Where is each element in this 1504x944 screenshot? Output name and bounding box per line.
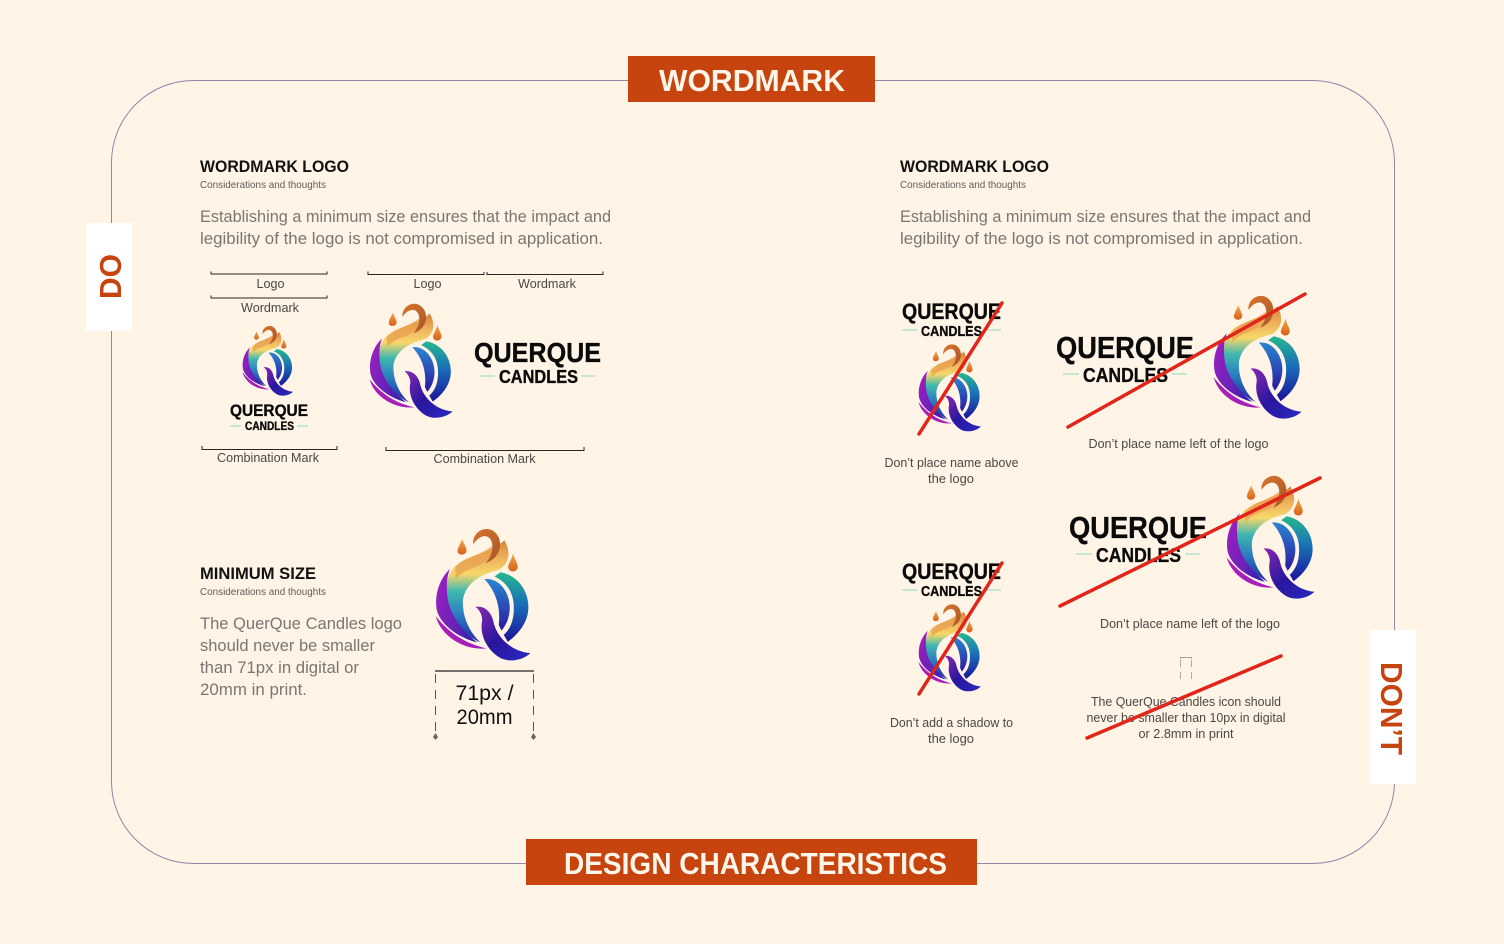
stacked combination mark diagram: QUERQUE	[230, 401, 308, 420]
horizontal combination mark diagram: QUERQUE	[474, 337, 601, 368]
don't: shadow on the logo: Don’t add a shadow to	[890, 716, 1013, 730]
minimum size text	[200, 564, 402, 699]
don't: name left of the logo, second example: CANDLES	[1096, 545, 1181, 567]
stacked combination mark diagram: Logo	[256, 277, 285, 291]
minimum size logo with measure: 20mm	[456, 706, 512, 729]
stacked combination mark diagram: CANDLES	[245, 421, 294, 433]
don't: name left of the logo, second example	[1060, 476, 1320, 631]
minimum size logo with measure	[433, 529, 536, 740]
banner: design characteristics	[526, 839, 977, 885]
don't: icon smaller than minimum	[1086, 656, 1286, 741]
don't: name above the logo: CANDLES	[921, 324, 982, 340]
don't: icon smaller than minimum: never be smaller than 10px in digital	[1086, 711, 1286, 725]
panel: do wordmark logo text: legibility of the logo is not compromised in application.	[200, 229, 603, 248]
horizontal combination mark diagram: CANDLES	[499, 367, 578, 387]
don't: name above the logo: the logo	[928, 472, 974, 486]
minimum size text: MINIMUM SIZE	[200, 564, 316, 583]
don't: name left of the logo, second example: QUERQUE	[1069, 510, 1207, 545]
minimum size text: should never be smaller	[200, 636, 375, 655]
panel: do wordmark logo text: Establishing a minimum size ensures that the impact and	[200, 207, 611, 226]
don't: icon smaller than minimum: The QuerQue Candles icon should	[1091, 695, 1281, 709]
stacked combination mark diagram	[202, 272, 337, 465]
don't: name above the logo	[884, 299, 1019, 486]
panel: don't wordmark logo text: Considerations and thoughts	[900, 179, 1026, 191]
banner: wordmark: WORDMARK	[659, 63, 846, 98]
don't: name left of the logo: Don’t place name left of the logo	[1088, 437, 1269, 451]
tab: don't	[1370, 630, 1416, 784]
panel: do wordmark logo text	[200, 157, 611, 248]
don't: name above the logo: QUERQUE	[902, 299, 1001, 324]
panel: do wordmark logo text: WORDMARK LOGO	[200, 157, 349, 176]
minimum size logo with measure: 71px /	[456, 682, 514, 705]
minimum size text: than 71px in digital or	[200, 658, 359, 677]
don't: name left of the logo, second example: Don’t place name left of the logo	[1100, 617, 1280, 631]
stacked combination mark diagram: Wordmark	[241, 301, 300, 315]
panel: don't wordmark logo text	[900, 157, 1311, 248]
horizontal combination mark diagram: Combination Mark	[434, 452, 536, 466]
horizontal combination mark diagram: Wordmark	[518, 277, 577, 291]
horizontal combination mark diagram	[368, 272, 603, 466]
don't: name above the logo: Don’t place name above	[884, 456, 1019, 470]
tab: do	[86, 223, 132, 331]
panel: do wordmark logo text: Considerations and thoughts	[200, 179, 326, 191]
banner: design characteristics: DESIGN CHARACTERISTICS	[564, 846, 947, 881]
don't: icon smaller than minimum: or 2.8mm in print	[1138, 727, 1234, 741]
panel: don't wordmark logo text: Establishing a minimum size ensures that the impact and	[900, 207, 1311, 226]
don't: shadow on the logo	[890, 559, 1013, 746]
minimum size text: The QuerQue Candles logo	[200, 614, 402, 633]
don't: name left of the logo	[1056, 294, 1305, 451]
don't: name left of the logo: CANDLES	[1083, 365, 1168, 387]
panel: don't wordmark logo text: WORDMARK LOGO	[900, 157, 1049, 176]
don't: shadow on the logo: the logo	[928, 732, 974, 746]
banner: wordmark	[628, 56, 875, 102]
don't: shadow on the logo: CANDLES	[921, 584, 982, 600]
don't: name left of the logo: QUERQUE	[1056, 330, 1194, 365]
tab: do: DO	[93, 254, 128, 299]
minimum size text: Considerations and thoughts	[200, 586, 326, 598]
don't: shadow on the logo: QUERQUE	[902, 559, 1001, 584]
horizontal combination mark diagram: Logo	[414, 277, 442, 291]
outer rounded frame	[112, 80, 1394, 864]
panel: don't wordmark logo text: legibility of the logo is not compromised in application.	[900, 229, 1303, 248]
minimum size text: 20mm in print.	[200, 680, 307, 699]
stacked combination mark diagram: Combination Mark	[217, 451, 320, 465]
tab: don't: DON’T	[1374, 662, 1409, 755]
